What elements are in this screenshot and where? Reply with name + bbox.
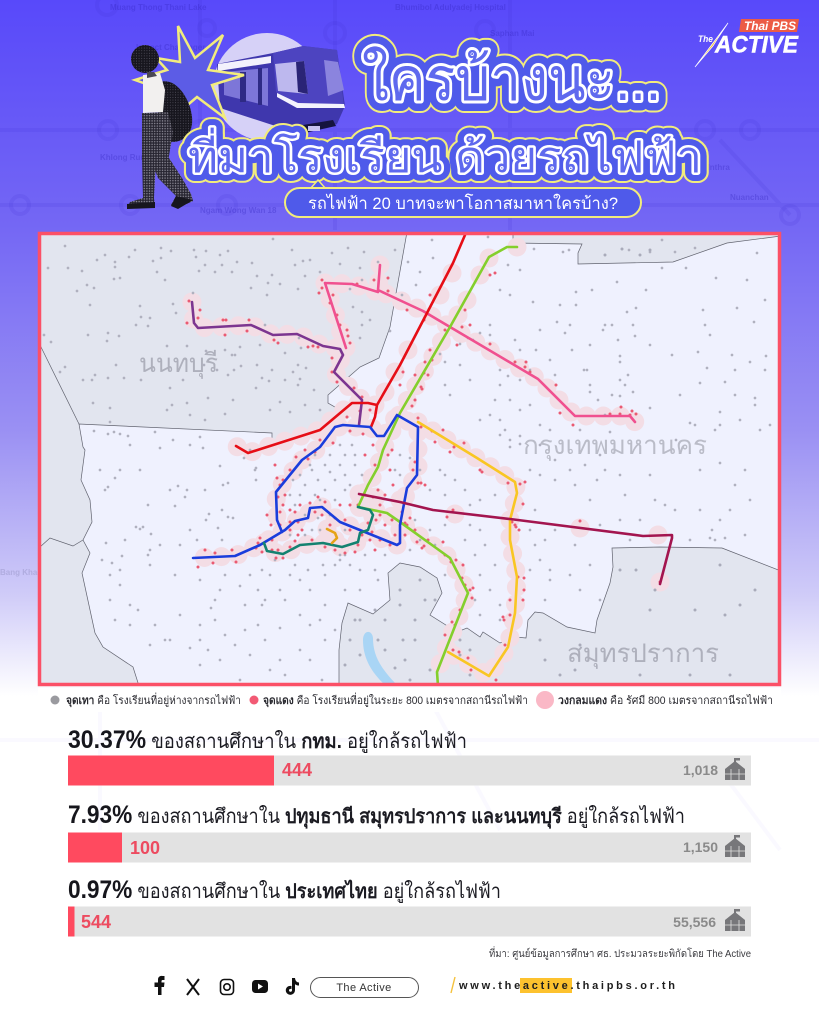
red dots: schools within 800 m [187, 273, 660, 680]
faint metro station labels: Khlong Rung [100, 153, 150, 162]
stat: Pathum Thani, Samut Prakan, Nonthaburi: 1,150 [683, 839, 718, 855]
title line 2: ที่มาโรงเรียน ด้วยรถไฟฟ้า [188, 128, 702, 182]
line: dark blue [193, 415, 418, 558]
region: Samut Prakan [339, 547, 781, 686]
map base [38, 232, 781, 686]
bar [68, 756, 751, 786]
faint metro station labels: Muang Thong Thani Lake [110, 3, 207, 12]
title line 2: ที่มาโรงเรียน ด้วยรถไฟฟ้า [188, 128, 702, 182]
line: yellow [418, 422, 517, 676]
faint metro station labels: Bang Khae [0, 568, 42, 577]
title line 2: ที่มาโรงเรียน ด้วยรถไฟฟ้า [188, 128, 702, 182]
faint metro station labels: Ram Inthra [688, 163, 730, 172]
legend [38, 688, 781, 712]
stat: Pathum Thani, Samut Prakan, Nonthaburi [68, 801, 751, 862]
legend: จุดแดง คือ โรงเรียนที่อยู่ในระยะ 800 เมตรจากสถานีรถไฟฟ้า [263, 692, 528, 708]
header illustration [127, 26, 345, 209]
stat: Thailand: 55,556 [673, 914, 716, 930]
source note: ที่มา: ศูนย์ข้อมูลการศึกษา ศธ. ประมวลระยะพิกัดโดย The Active [489, 946, 751, 960]
icon: train in circle [213, 33, 345, 141]
line: MRT purple [192, 302, 362, 425]
legend: วงกลมแดง คือ รัศมี 800 เมตรจากสถานีรถไฟฟ้า [558, 694, 773, 707]
footer pill: The Active: The Active [336, 982, 392, 994]
faint metro station labels [0, 3, 769, 577]
map frame [40, 234, 780, 684]
icon: youtube [252, 980, 268, 993]
subtitle pill [285, 180, 641, 217]
line: light green [358, 247, 517, 686]
river [363, 632, 395, 683]
icon: tiktok [286, 978, 299, 995]
stat: Bangkok: 1,018 [683, 762, 718, 778]
line: gold [327, 529, 337, 543]
icon: school [725, 909, 745, 931]
title line 1: ใครบ้างนะ... [362, 46, 661, 113]
icon: X [187, 979, 199, 995]
logo: Thai PBS The Active: The [698, 34, 714, 45]
logo: Thai PBS The Active [695, 19, 799, 67]
faint metro station labels: Bhumibol Adulyadej Hospital [395, 3, 506, 12]
legend: จุดเทา คือ โรงเรียนที่อยู่ห่างจากรถไฟฟ้า [66, 692, 241, 708]
line: red [236, 235, 465, 453]
rail lines [192, 235, 672, 686]
isolated buffers along lines [376, 238, 670, 592]
heading: 30.37% ของสถานศึกษาใน กทม. อยู่ใกล้รถไฟฟ้า [68, 726, 467, 754]
faint metro station labels: Lat Pla Khao [220, 153, 269, 162]
label: Bangkok: กรุงเทพมหานคร [523, 430, 707, 461]
region: Nonthaburi and western provinces [38, 232, 407, 686]
icon: facebook [154, 976, 164, 995]
faint metro station labels: Ngam Wong Wan 18 [200, 206, 277, 215]
line: teal [264, 507, 373, 554]
bar [68, 832, 751, 862]
bar [68, 906, 751, 936]
heading: 7.93% ของสถานศึกษาใน ปทุมธานี สมุทรปราการ และนนทบุรี อยู่ใกล้รถไฟฟ้า [68, 801, 685, 829]
icon: yellow star burst [135, 26, 244, 120]
icon: school [725, 835, 745, 857]
logo: Thai PBS The Active: Thai PBS [744, 19, 796, 33]
title line 1: ใครบ้างนะ... [362, 46, 661, 113]
icon: instagram [220, 980, 234, 994]
region: Pathum Thani [513, 232, 781, 264]
logo: Thai PBS The Active: ACTIVE [714, 32, 799, 58]
faint metro station labels: Saphan Mai [490, 29, 534, 38]
faint metro station labels: Impact Challenger [136, 43, 205, 52]
grey dots: schools far from rail [44, 237, 770, 680]
subtitle pill: รถไฟฟ้า 20 บาทจะพาโอกาสมาหาใครบ้าง? [308, 193, 618, 213]
icon: school [725, 758, 745, 780]
stat: Bangkok: 444 [282, 760, 312, 780]
800 m station buffers [192, 265, 635, 676]
grey dots inside Samut Prakan [345, 249, 755, 680]
label: Samut Prakan: สมุทรปราการ [567, 638, 719, 669]
line: maroon [359, 494, 672, 584]
stat: Bangkok [68, 726, 751, 786]
line: pink [325, 265, 635, 422]
stat: Thailand: 544 [81, 912, 111, 932]
faint metro station labels: Nuanchan [730, 193, 769, 202]
website url: www.theactive.thaipbs.or.th [458, 980, 675, 992]
stat: Pathum Thani, Samut Prakan, Nonthaburi: 100 [130, 838, 160, 858]
stat: Thailand [68, 876, 751, 936]
heading: 0.97% ของสถานศึกษาใน ประเทศไทย อยู่ใกล้รถไฟฟ้า [68, 876, 501, 904]
panel: map [38, 232, 781, 686]
label: Nonthaburi: นนทบุรี [139, 348, 218, 379]
footer pill: The Active [310, 978, 418, 998]
decorative province line [40, 345, 83, 547]
footer social icons [154, 976, 299, 995]
icon: student with backpack [127, 45, 193, 209]
title line 1: ใครบ้างนะ... [362, 46, 661, 113]
